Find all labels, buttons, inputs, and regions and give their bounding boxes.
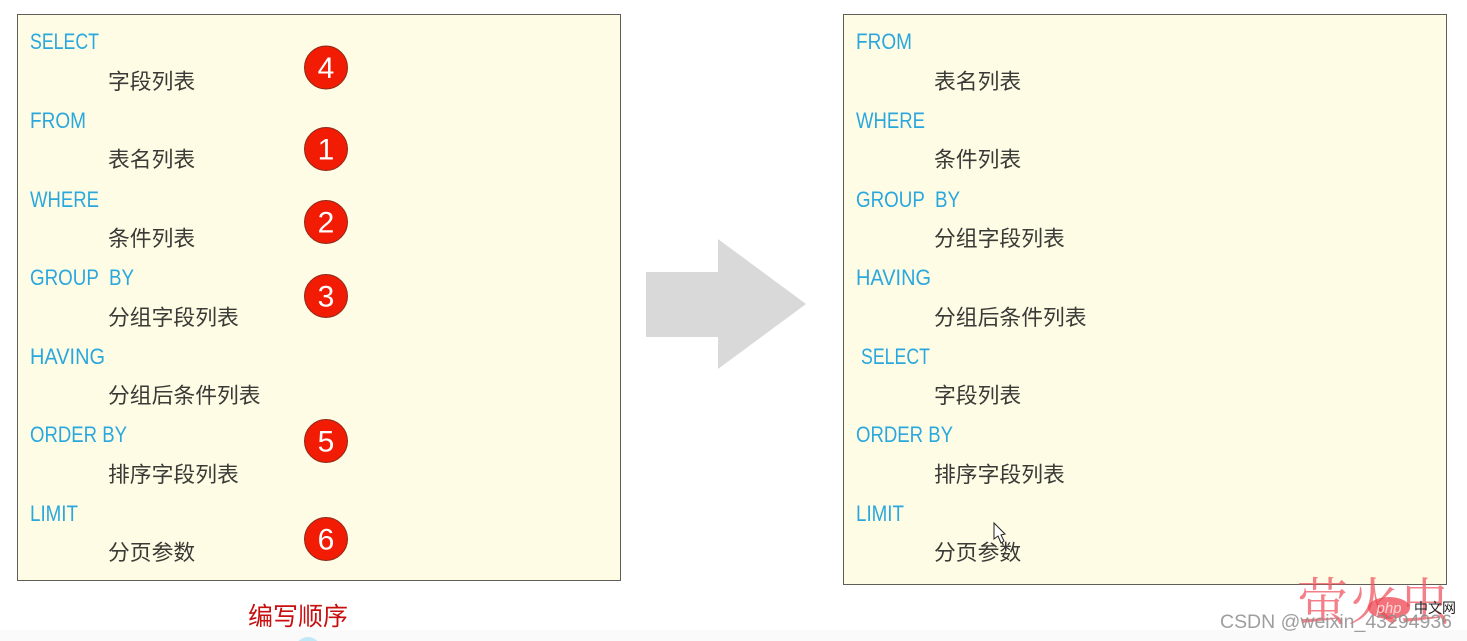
- panel: execution order: [844, 14, 1446, 584]
- text: paging parameters: 分页参数: [108, 540, 195, 565]
- decoration: partial cyan circle: [295, 637, 321, 641]
- text: field list: 字段列表: [108, 69, 195, 94]
- keyword: SELECT: SELECT: [861, 344, 930, 369]
- keyword: ORDER BY: ORDER BY: [30, 422, 127, 447]
- keyword: ORDER BY: ORDER BY: [856, 422, 953, 447]
- watermark: site name: 萤火虫: [1297, 561, 1450, 635]
- badge: 5: [304, 420, 348, 462]
- text: condition list: 条件列表: [108, 226, 195, 251]
- badge: 1: 1: [318, 134, 334, 166]
- badge: 5: 5: [318, 426, 334, 458]
- watermark: php badge: [1368, 597, 1410, 619]
- text: condition list: 条件列表: [934, 147, 1021, 172]
- badge: 3: [304, 274, 348, 318]
- watermark: php badge: php: [1375, 600, 1402, 617]
- watermark: Chinese site label: 中文网: [1414, 600, 1456, 616]
- watermark: CSDN credit: CSDN @weixin_43294936: [1220, 611, 1452, 633]
- icon: mouse cursor: [994, 523, 1005, 543]
- text: field list: 字段列表: [934, 383, 1021, 408]
- keyword: HAVING: HAVING: [30, 344, 105, 369]
- text: paging parameters: 分页参数: [934, 540, 1021, 565]
- text: sort field list: 排序字段列表: [934, 462, 1065, 487]
- keyword: FROM: FROM: [30, 108, 86, 133]
- text: group field list: 分组字段列表: [108, 305, 239, 330]
- badge: 2: 2: [318, 206, 334, 240]
- arrow: left to right: [646, 239, 806, 369]
- keyword: GROUP BY: GROUP BY: [30, 265, 134, 290]
- text: table list: 表名列表: [934, 69, 1021, 94]
- badge: 4: [304, 46, 348, 89]
- panel: writing order: [18, 14, 620, 580]
- badge: 1: [304, 128, 348, 170]
- keyword: LIMIT: LIMIT: [30, 501, 78, 526]
- keyword: HAVING: HAVING: [856, 265, 931, 290]
- text: group field list: 分组字段列表: [934, 226, 1065, 251]
- badge: 6: [304, 518, 348, 560]
- keyword: LIMIT: LIMIT: [856, 501, 904, 526]
- keyword: FROM: FROM: [856, 29, 912, 54]
- badge: 4: 4: [318, 52, 334, 85]
- badge: 3: 3: [318, 280, 334, 314]
- keyword: GROUP BY: GROUP BY: [856, 187, 960, 212]
- badge: 2: [304, 200, 348, 244]
- text: table list: 表名列表: [108, 147, 195, 172]
- text: post-group condition list: 分组后条件列表: [108, 383, 261, 408]
- keyword: WHERE: WHERE: [856, 108, 925, 133]
- keyword: SELECT: SELECT: [30, 29, 99, 54]
- text: sort field list: 排序字段列表: [108, 462, 239, 487]
- keyword: WHERE: WHERE: [30, 187, 99, 212]
- text: post-group condition list: 分组后条件列表: [934, 305, 1087, 330]
- caption: writing order: 编写顺序: [248, 603, 348, 631]
- badge: 6: 6: [318, 524, 334, 556]
